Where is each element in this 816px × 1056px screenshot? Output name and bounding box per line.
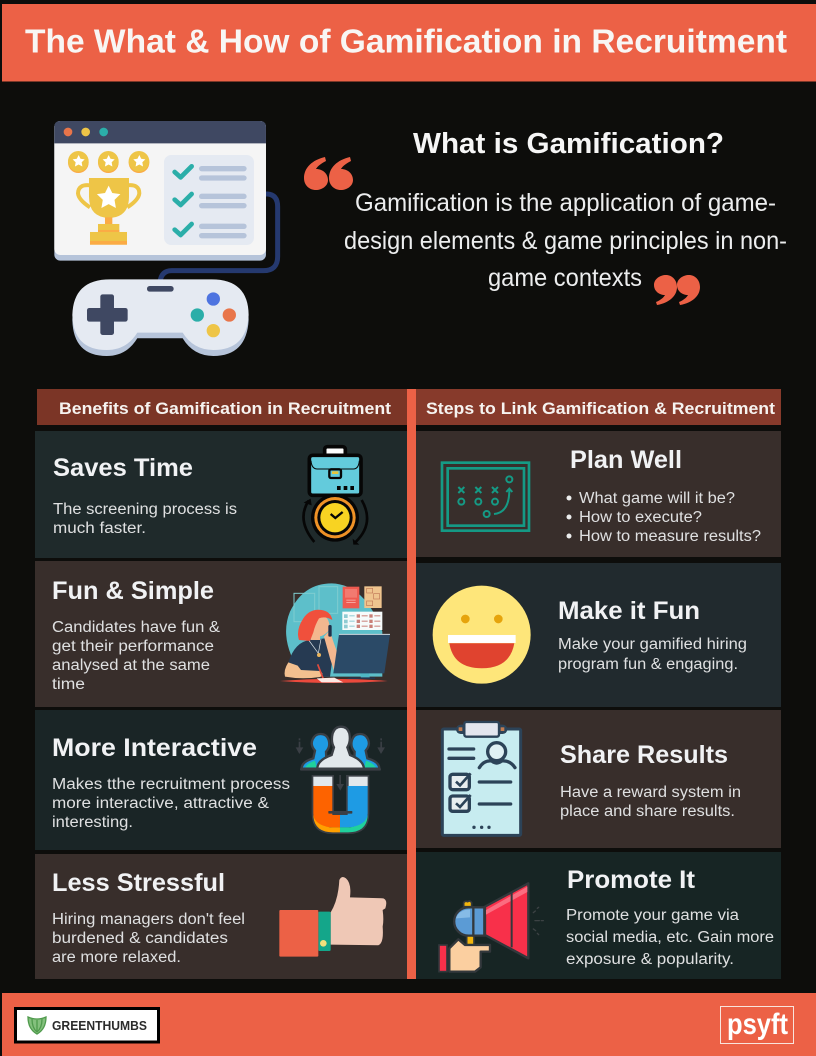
text: share results: place and share results. xyxy=(560,803,735,820)
what is gamification heading: What is Gamification? xyxy=(413,128,724,160)
definition text: game contexts xyxy=(488,264,642,292)
text: less stressful: Hiring managers don't feel xyxy=(52,911,245,928)
header banner xyxy=(2,4,816,82)
text: promote it: Promote your game via xyxy=(566,907,739,924)
title: The What & How of Gamification in Recruitment xyxy=(25,22,787,60)
heading: plan well: Plan Well xyxy=(570,446,682,474)
text: fun and simple: get their performance xyxy=(52,638,214,655)
column header: benefits: Benefits of Gamification in Recruitment xyxy=(59,400,392,418)
definition text xyxy=(344,189,787,292)
panel: saves time xyxy=(35,431,407,558)
column header: steps xyxy=(416,389,781,425)
bullet list: What game will it be? xyxy=(579,490,735,507)
text: saves time: much faster. xyxy=(53,520,146,537)
heading: saves time: Saves Time xyxy=(53,454,193,482)
heading: share results: Share Results xyxy=(560,741,728,769)
icon: smiley face xyxy=(433,586,531,684)
heading: promote it: Promote It xyxy=(567,866,696,894)
icon: closing quote mark xyxy=(654,275,700,305)
text: less stressful xyxy=(52,911,245,966)
text: fun and simple: Candidates have fun & xyxy=(52,619,221,636)
heading: less stressful: Less Stressful xyxy=(52,869,225,897)
icon: briefcase and clock xyxy=(303,447,367,545)
panel: promote it xyxy=(416,852,781,979)
panel: more interactive xyxy=(35,710,407,850)
text: more interactive: interesting. xyxy=(52,814,133,831)
logo: psyft: psyft xyxy=(727,1008,788,1041)
text: share results: Have a reward system in xyxy=(560,784,741,801)
text: make it fun xyxy=(558,636,747,673)
icon: fingerprint shield xyxy=(28,1017,46,1034)
icon: woman on phone at computer xyxy=(280,583,390,683)
centre divider xyxy=(407,389,416,979)
text: more interactive xyxy=(52,776,290,831)
footer band xyxy=(2,993,816,1056)
logo: greenthumbs xyxy=(16,1008,158,1042)
heading: more interactive: More Interactive xyxy=(52,734,257,762)
text: make it fun: program fun & engaging. xyxy=(558,656,738,673)
column header: benefits xyxy=(37,389,407,425)
icon: magnet attracting people xyxy=(296,727,385,834)
text: saves time xyxy=(53,501,237,537)
text: saves time: The screening process is xyxy=(53,501,237,518)
icon: opening quote mark xyxy=(304,157,353,190)
icon: game plan board xyxy=(442,463,529,531)
column header: steps: Steps to Link Gamification & Recruitment xyxy=(426,400,776,418)
text: more interactive: more interactive, attractive & xyxy=(52,795,270,812)
text: fun and simple xyxy=(52,619,221,693)
text: more interactive: Makes tthe recruitment process xyxy=(52,776,290,793)
panel: make it fun xyxy=(416,563,781,707)
icon: thumbs up xyxy=(279,877,386,957)
icon: clipboard checklist xyxy=(442,722,521,835)
text: promote it: exposure & popularity. xyxy=(566,951,734,968)
definition text: Gamification is the application of game- xyxy=(355,189,776,217)
text: less stressful: burdened & candidates xyxy=(52,930,228,947)
text: make it fun: Make your gamified hiring xyxy=(558,636,747,653)
logo: greenthumbs: GREENTHUMBS xyxy=(52,1019,147,1033)
icon: game console window with controller xyxy=(54,121,278,356)
heading: make it fun: Make it Fun xyxy=(558,597,700,625)
icon: megaphone with hand xyxy=(439,883,543,972)
bullet list: How to measure results? xyxy=(579,528,761,545)
definition text: design elements & game principles in non- xyxy=(344,227,787,255)
bullet list xyxy=(566,490,761,545)
panel: fun and simple xyxy=(35,561,407,707)
text: promote it xyxy=(566,907,774,968)
heading: fun and simple: Fun & Simple xyxy=(52,577,214,605)
text: less stressful: are more relaxed. xyxy=(52,949,181,966)
text: fun and simple: time xyxy=(52,676,85,693)
text: fun and simple: analysed at the same xyxy=(52,657,210,674)
text: share results xyxy=(560,784,741,820)
panel: plan well xyxy=(416,431,781,557)
bullet list: How to execute? xyxy=(579,509,702,526)
panel: share results xyxy=(416,710,781,848)
text: promote it: social media, etc. Gain more xyxy=(566,929,774,946)
panel: less stressful xyxy=(35,854,407,979)
